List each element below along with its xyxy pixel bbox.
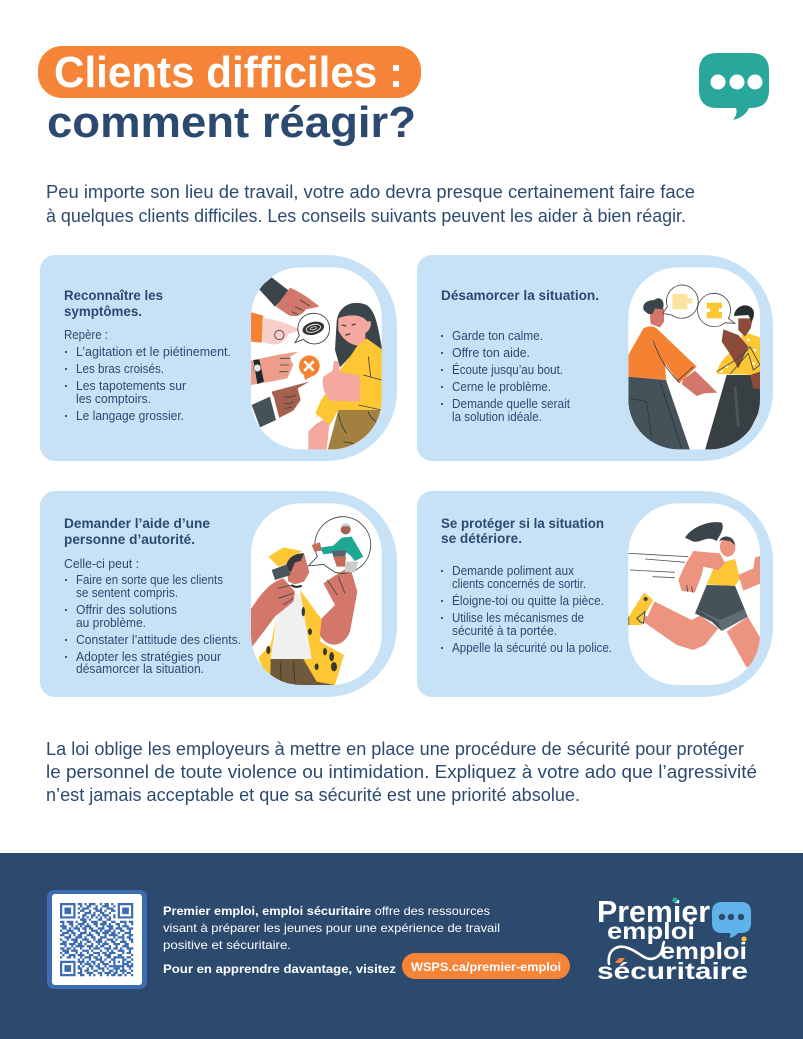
bullet list: Adopter les stratégies pour xyxy=(76,650,221,664)
heading: personne d’autorité. xyxy=(64,531,195,547)
logo: emploi xyxy=(607,918,695,944)
bullet list: se sentent compris. xyxy=(76,586,178,600)
footer description xyxy=(163,904,500,976)
title line 1: Clients difficiles : xyxy=(54,48,403,97)
illustration: woman running xyxy=(628,503,761,685)
bullet list: désamorcer la situation. xyxy=(76,662,204,676)
bullet list xyxy=(441,329,570,424)
bullet list: les comptoirs. xyxy=(76,392,151,406)
heading: Reconnaître les xyxy=(64,287,163,303)
bullet list: Appelle la sécurité ou la police. xyxy=(452,641,612,655)
illustration: two people talking xyxy=(628,267,760,450)
bullet list: Les bras croisés. xyxy=(76,362,164,376)
panel: se protéger si la situation se détériore xyxy=(417,491,773,697)
bullet list: Écoute jusqu’au bout. xyxy=(452,362,563,377)
bullet list: la solution idéale. xyxy=(452,410,542,424)
website pill: WSPS.ca/premier-emploi xyxy=(411,960,561,974)
heading: se détériore. xyxy=(441,530,522,546)
heading xyxy=(64,287,163,319)
bullet list: Demande poliment aux xyxy=(452,564,575,578)
logo: sécuritaire xyxy=(597,958,748,984)
logo: emploi xyxy=(660,938,747,964)
closing paragraph: n’est jamais acceptable et que sa sécurité est une priorité absolue. xyxy=(46,785,580,805)
bullet list: au problème. xyxy=(76,616,146,630)
bullet list: Repère : xyxy=(64,328,108,342)
bullet list: Constater l’attitude des clients. xyxy=(76,633,241,647)
QR code xyxy=(47,890,147,989)
heading xyxy=(441,515,604,546)
bullet list: sécurité à ta portée. xyxy=(452,624,557,638)
illustration: pointing hands xyxy=(251,267,383,450)
bullet list xyxy=(441,564,612,655)
heading: symptômes. xyxy=(64,303,142,319)
bullet list: Cerne le problème. xyxy=(452,380,551,394)
bullet list: Celle-ci peut : xyxy=(64,557,139,571)
heading xyxy=(64,515,210,547)
panel: désamorcer la situation xyxy=(417,255,773,461)
bullet list: Éloigne-toi ou quitte la pièce. xyxy=(452,593,604,608)
intro text xyxy=(46,182,695,226)
logo xyxy=(597,894,751,984)
footer description: positive et sécuritaire. xyxy=(163,938,291,952)
footer description: visant à préparer les jeunes pour une expérience de travail xyxy=(163,921,500,935)
closing paragraph: La loi oblige les employeurs à mettre en place une procédure de sécurité pour protéger xyxy=(46,739,744,759)
bullet list: Le langage grossier. xyxy=(76,409,184,423)
bullet list: Faire en sorte que les clients xyxy=(76,573,223,587)
website pill xyxy=(402,953,570,979)
title line 2: comment réagir? xyxy=(47,98,416,147)
footer description: Pour en apprendre davantage, visitez xyxy=(163,962,396,976)
bullet list: Demande quelle serait xyxy=(452,397,570,411)
bullet list: Garde ton calme. xyxy=(452,329,543,343)
closing paragraph xyxy=(46,739,757,805)
panel: reconnaître les symptômes xyxy=(40,255,397,461)
intro text: Peu importe son lieu de travail, votre ado devra presque certainement faire face xyxy=(46,182,695,202)
heading: Demander l’aide d’une xyxy=(64,515,210,531)
footer description: Premier emploi, emploi sécuritaire offre des ressources xyxy=(163,904,490,918)
bullet list: Utilise les mécanismes de xyxy=(452,611,584,625)
bullet list: Les tapotements sur xyxy=(76,379,186,393)
logo: Premier xyxy=(597,894,710,929)
bullet list: Offrir des solutions xyxy=(76,603,177,617)
bullet list: clients concernés de sortir. xyxy=(452,577,586,591)
bullet list: L’agitation et le piétinement. xyxy=(76,345,231,359)
bullet list xyxy=(64,328,231,423)
footer xyxy=(0,853,803,1039)
title pill xyxy=(38,46,421,98)
heading: Désamorcer la situation. xyxy=(441,287,599,303)
closing paragraph: le personnel de toute violence ou intimidation. Expliquez à votre ado que l’agressivité xyxy=(46,762,757,782)
bullet list xyxy=(64,557,241,676)
panel: demander l'aide d'une personne d'autorité xyxy=(40,491,397,697)
intro text: à quelques clients difficiles. Les conseils suivants peuvent les aider à bien réagir. xyxy=(46,206,686,226)
title xyxy=(38,46,421,147)
icon: speech bubble xyxy=(699,53,769,120)
bullet list: Offre ton aide. xyxy=(452,346,530,360)
heading: Se protéger si la situation xyxy=(441,515,604,531)
illustration: person on phone xyxy=(251,503,382,686)
